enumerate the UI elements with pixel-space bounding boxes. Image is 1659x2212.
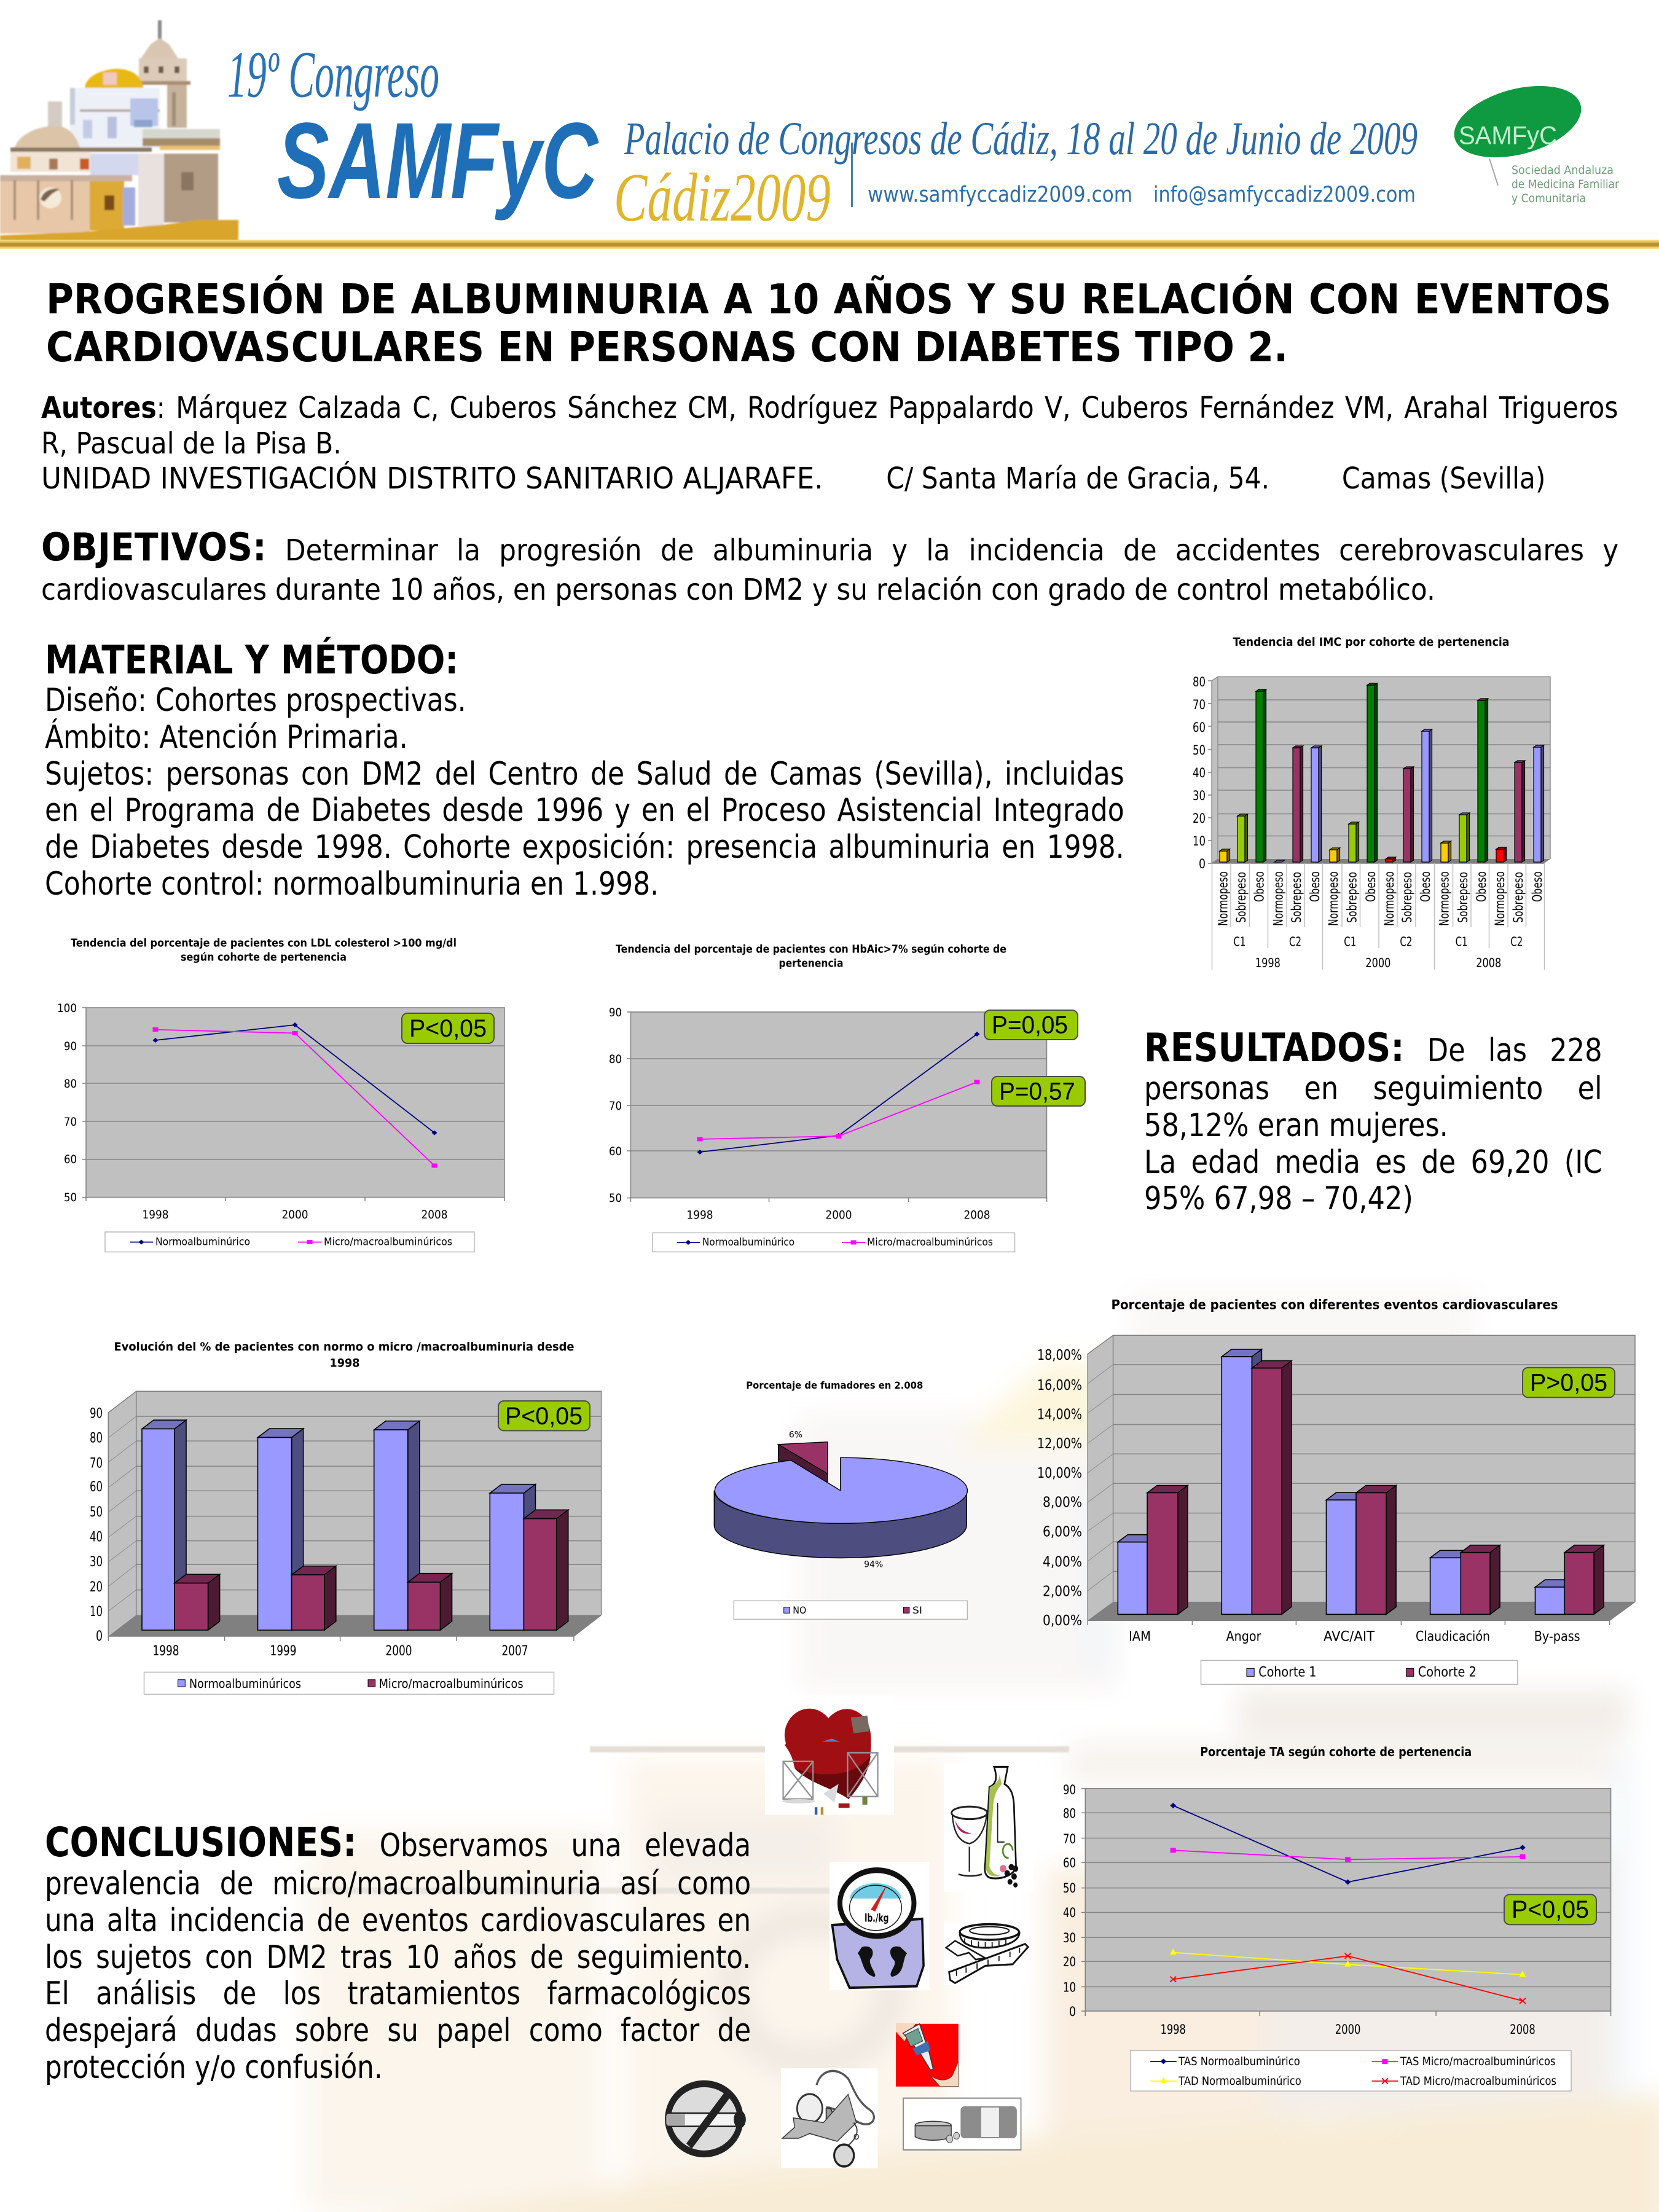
legend: NO	[793, 1604, 806, 1616]
y axis labels: 80	[1193, 675, 1206, 689]
text block: material y método: en el Programa de Diabetes desde 1996 y en el Proceso Asistencial Integrado	[45, 792, 1124, 829]
text: email: info@samfyccadiz2009.com	[1153, 182, 1416, 208]
icon: bathroom scale	[830, 1862, 930, 1990]
background watermark: faded building	[296, 1290, 1659, 2212]
axis labels	[1063, 1783, 1076, 2019]
text block: resultados: 95% 67,98 – 70,42)	[1144, 1180, 1413, 1217]
chart: Porcentaje TA	[1063, 1744, 1611, 2091]
legend	[734, 1601, 967, 1619]
slice: NO	[715, 1457, 967, 1523]
chart: HbA1c trend	[609, 943, 1085, 1252]
logo: SAMFyC society: SAMFyC	[1459, 120, 1557, 150]
axis labels: 2,00%	[1043, 1583, 1082, 1599]
chart: Porcentaje TA: 2008	[1510, 2022, 1535, 2037]
chart: eventos cardiovasculares: Claudicación	[1416, 1630, 1490, 1644]
axis labels: 60	[64, 1153, 77, 1166]
category labels	[1216, 871, 1545, 926]
chart: eventos cardiovasculares: IAM	[1129, 1630, 1151, 1644]
p-value badge: P<0,05	[1512, 1896, 1589, 1923]
background bands	[307, 1746, 1069, 1894]
text: 19º Congreso: 19º Congreso	[227, 38, 439, 112]
legend: TAS Micro/macroalbuminúricos	[1400, 2055, 1556, 2068]
text block: material y método: Sujetos: personas con DM2 del Centro de Salud de Camas (Sevilla), incluidas	[45, 756, 1124, 793]
chart title: Tendencia del porcentaje de pacientes con HbAic>7% según cohorte de	[616, 943, 1006, 956]
axis labels: 50	[609, 1191, 622, 1205]
text block: conclusiones	[45, 1819, 751, 2086]
chart: Evolución normo / micro-macroalbuminuria: 2007	[501, 1644, 528, 1659]
series: TAD Normoalbuminúrico	[1170, 1948, 1526, 1977]
chart: LDL colesterol trend: 2000	[281, 1208, 308, 1222]
axis labels: 50	[90, 1505, 103, 1520]
cohort and year labels: C1	[1344, 935, 1356, 949]
category labels: Obeso	[1252, 871, 1267, 902]
legend: Micro/macroalbuminúricos	[379, 1676, 524, 1691]
axis labels	[57, 1002, 77, 1204]
text block: conclusiones: los sujetos con DM2 tras 10 años de seguimiento.	[45, 1939, 751, 1976]
icon: sphygmomanometer	[781, 2068, 878, 2168]
p-value badge: P<0,05	[409, 1015, 487, 1042]
y axis labels: 30	[1193, 788, 1206, 803]
chart: Porcentaje de fumadores pie	[714, 1379, 967, 1619]
axis labels: 70	[609, 1099, 622, 1113]
legend: TAD Micro/macroalbuminúricos	[1400, 2074, 1556, 2088]
cohort and year labels	[1233, 935, 1523, 970]
p-value badge: P=0,05: P=0,05	[992, 1011, 1068, 1038]
text block: authors and affiliation: Camas (Sevilla)	[1342, 461, 1545, 496]
text block: conclusiones: despejará dudas sobre su papel como factor de	[45, 2012, 751, 2049]
p-value badge: P=0,57: P=0,57	[999, 1078, 1075, 1105]
category labels: Obeso	[1474, 871, 1489, 902]
axis labels: 12,00%	[1037, 1436, 1082, 1452]
legend: TAD Normoalbuminúrico	[1178, 2074, 1301, 2088]
chart title: pertenencia	[779, 957, 843, 970]
axis labels: 0	[1069, 2004, 1076, 2019]
chart: eventos cardiovasculares: AVC/AIT	[1324, 1630, 1375, 1644]
text block: material y método: de Diabetes desde 1998. Cohorte exposición: presencia albuminuria en 1998.	[45, 829, 1124, 866]
text block: authors and affiliation	[41, 391, 1618, 496]
legend: Normoalbuminúricos	[189, 1676, 301, 1691]
text block: objetivos: cardiovasculares durante 10 años, en personas con DM2 y su relación con grado de control metabólico.	[41, 573, 1435, 607]
legend: Normoalbuminúrico	[702, 1236, 794, 1249]
axis labels: 10	[90, 1604, 103, 1620]
title	[46, 275, 1611, 371]
chart: Porcentaje de fumadores pie: 94%	[864, 1560, 883, 1570]
chart: HbA1c trend: 2000	[826, 1208, 852, 1222]
logo: SAMFyC society: y Comunitaria	[1512, 192, 1586, 205]
category labels: Sobrepeso	[1289, 872, 1304, 923]
cohort and year labels: C2	[1510, 935, 1523, 949]
axis labels: 50	[1063, 1881, 1076, 1896]
text block: objetivos: OBJETIVOS: Determinar la progresión de albuminuria y la incidencia de accidentes cerebrovasculares y	[41, 525, 1618, 570]
axis labels: 18,00%	[1037, 1347, 1082, 1363]
category labels: Sobrepeso	[1456, 872, 1470, 923]
axis labels: 16,00%	[1037, 1378, 1082, 1394]
text block: resultados: personas en seguimiento el	[1144, 1070, 1602, 1107]
text block: resultados	[1144, 1025, 1602, 1217]
text block: resultados: RESULTADOS: De las 228	[1144, 1025, 1602, 1071]
axis labels: 14,00%	[1037, 1407, 1082, 1423]
chart title: Porcentaje TA según cohorte de pertenencia	[1200, 1744, 1472, 1759]
axis labels: 60	[1063, 1856, 1076, 1870]
axis labels: 20	[90, 1580, 103, 1595]
exploded slice: SI	[779, 1442, 828, 1482]
series: TAS Normoalbuminúrico	[1170, 1803, 1526, 1885]
cohort and year labels: 2000	[1365, 955, 1390, 970]
text block: material y método: MATERIAL Y MÉTODO:	[45, 637, 458, 683]
series: TAD Micro/macroalbuminúricos	[1170, 1953, 1526, 2004]
cohort and year labels: C1	[1456, 935, 1468, 949]
cohort and year labels: C2	[1289, 935, 1301, 949]
axis labels: 90	[90, 1406, 103, 1422]
legend: Micro/macroalbuminúricos	[324, 1236, 452, 1249]
category labels: Normopeso	[1326, 871, 1341, 926]
title: CARDIOVASCULARES EN PERSONAS CON DIABETES TIPO 2.	[46, 323, 1288, 371]
category labels: Obeso	[1308, 871, 1322, 902]
category labels: Normopeso	[1271, 871, 1285, 926]
series: Normoalbuminúrico	[697, 1032, 979, 1155]
text block: authors and affiliation: C/ Santa María de Gracia, 54.	[886, 461, 1269, 496]
y axis labels: 20	[1193, 811, 1206, 826]
chart: Porcentaje TA: 2000	[1335, 2022, 1360, 2037]
axis labels: 30	[90, 1555, 103, 1570]
chart title	[114, 1340, 574, 1370]
chart: LDL colesterol trend: 2008	[422, 1208, 447, 1222]
text block: authors and affiliation: UNIDAD INVESTIGACIÓN DISTRITO SANITARIO ALJARAFE.	[41, 461, 823, 496]
text: Cádiz 2009: Cádiz2009	[614, 160, 831, 236]
chart: Evolución normo / micro-macroalbuminuria: 1999	[270, 1644, 296, 1659]
legend: Normoalbuminúrico	[155, 1236, 250, 1249]
axis labels: 70	[90, 1456, 103, 1471]
chart: Tendencia del IMC	[1193, 635, 1550, 970]
banner: congress header	[0, 20, 1659, 249]
data labels: 6%	[789, 1430, 802, 1440]
chart: eventos cardiovasculares: Angor	[1226, 1630, 1261, 1644]
text block: authors and affiliation: Autores: Márquez Calzada C, Cuberos Sánchez CM, Rodríguez Pappalardo V, Cuberos Fernández VM, Arahal Trigueros	[41, 391, 1618, 425]
icon: bathroom scale: lb./kg	[865, 1912, 888, 1924]
text block: conclusiones: una alta incidencia de eventos cardiovasculares en	[45, 1902, 751, 1939]
text: SAMFyC: SAMFyC	[277, 101, 599, 221]
text: website: www.samfyccadiz2009.com	[868, 182, 1132, 208]
text block: material y método: Diseño: Cohortes prospectivas.	[45, 682, 466, 719]
cohort and year labels: C1	[1233, 935, 1245, 949]
y axis labels: 60	[1193, 720, 1206, 735]
text block: conclusiones: prevalencia de micro/macroalbuminuria así como	[45, 1865, 751, 1902]
chart: Evolución normo / micro-macroalbuminuria: 1998	[152, 1644, 179, 1659]
axis labels	[609, 1006, 622, 1205]
y axis labels: 40	[1193, 766, 1206, 780]
bars	[1220, 683, 1543, 862]
text block: resultados: 58,12% eran mujeres.	[1144, 1107, 1448, 1144]
text block: conclusiones: protección y/o confusión.	[45, 2049, 383, 2086]
series: Normoalbuminúrico	[152, 1022, 437, 1135]
axis labels: 4,00%	[1043, 1554, 1082, 1570]
bars	[142, 1420, 568, 1630]
axis labels: 0,00%	[1043, 1613, 1082, 1629]
chart title: Porcentaje de pacientes con diferentes eventos cardiovasculares	[1111, 1297, 1558, 1312]
axis labels: 100	[57, 1002, 77, 1015]
axis labels: 20	[1063, 1955, 1076, 1969]
axis labels: 40	[90, 1529, 103, 1545]
icon: glucometer and finger	[896, 2024, 959, 2087]
axis labels: 30	[1063, 1931, 1076, 1945]
axis labels: 90	[1063, 1783, 1076, 1797]
text block: conclusiones: El análisis de los tratamientos farmacológicos	[45, 1975, 751, 2012]
y axis labels: 10	[1193, 834, 1206, 849]
category labels: Sobrepeso	[1400, 872, 1414, 923]
axis labels: 80	[64, 1077, 77, 1091]
category labels: Normopeso	[1492, 871, 1507, 926]
axis labels: 50	[64, 1191, 77, 1204]
series: Micro/macroalbuminúricos	[152, 1027, 437, 1167]
legend: Cohorte 2	[1418, 1665, 1477, 1680]
axis labels	[1037, 1347, 1082, 1629]
chart title: Evolución del % de pacientes con normo o micro /macroalbuminuria desde	[114, 1340, 574, 1354]
icon: pill bottle	[903, 2098, 1021, 2150]
legend	[653, 1233, 1015, 1252]
chart title: Tendencia del porcentaje de pacientes con LDL colesterol >100 mg/dl	[71, 936, 457, 950]
axis labels: 10	[1063, 1980, 1076, 1994]
axis labels: 8,00%	[1043, 1495, 1082, 1511]
axis labels: 0	[96, 1629, 103, 1644]
logo: SAMFyC society	[1446, 73, 1619, 205]
category labels: Sobrepeso	[1234, 872, 1249, 923]
title: PROGRESIÓN DE ALBUMINURIA A 10 AÑOS Y SU RELACIÓN CON EVENTOS	[46, 275, 1611, 323]
text block: conclusiones: CONCLUSIONES: Observamos una elevada	[45, 1819, 751, 1866]
axis labels: 40	[1063, 1905, 1076, 1920]
chart: LDL colesterol trend: 1998	[143, 1208, 168, 1222]
chart title	[71, 936, 457, 963]
legend: Cohorte 1	[1258, 1665, 1317, 1680]
logo: SAMFyC society: de Medicina Familiar	[1512, 178, 1619, 191]
legend	[144, 1672, 554, 1694]
chart: HbA1c trend: 2008	[963, 1208, 990, 1222]
axis labels: 70	[1063, 1832, 1076, 1846]
chart title: Tendencia del IMC por cohorte de pertenencia	[1233, 635, 1509, 649]
axis labels: 70	[64, 1115, 77, 1129]
chart: LDL colesterol trend	[57, 936, 504, 1252]
axis labels	[90, 1406, 103, 1644]
y axis labels: 0	[1199, 857, 1206, 871]
icon: heart under construction	[765, 1696, 894, 1814]
legend: SI	[912, 1604, 922, 1616]
axis labels: 80	[609, 1053, 622, 1066]
legend	[105, 1232, 474, 1252]
chart: HbA1c trend: 1998	[687, 1208, 713, 1222]
y axis labels: 50	[1193, 743, 1206, 758]
series: TAS Micro/macroalbuminúricos	[1171, 1848, 1525, 1862]
p-value badge: P>0,05	[1530, 1369, 1607, 1396]
category separators	[1212, 863, 1545, 970]
chart: Evolución normo / micro-macroalbuminuria	[90, 1340, 602, 1694]
text block: material y método	[45, 637, 1124, 903]
category labels: Sobrepeso	[1511, 872, 1526, 923]
cohort and year labels: 2008	[1476, 955, 1501, 970]
text block: material y método: Cohorte control: normoalbuminuria en 1.998.	[45, 866, 659, 903]
axis labels: 90	[609, 1006, 622, 1019]
chart: Evolución normo / micro-macroalbuminuria: 2000	[386, 1644, 412, 1659]
p-value badge: P<0,05	[505, 1403, 582, 1430]
text block: material y método: Ámbito: Atención Primaria.	[45, 719, 408, 756]
icons: clip-art risk factors	[665, 1696, 1033, 2168]
axis labels: 10,00%	[1037, 1465, 1082, 1481]
icon: measuring tape	[944, 1921, 1029, 1985]
category labels: Obeso	[1530, 871, 1545, 902]
bars	[1118, 1349, 1604, 1614]
icon: Cádiz cathedral illustration	[0, 20, 238, 243]
text block: resultados: La edad media es de 69,20 (IC	[1144, 1144, 1602, 1181]
divider	[851, 143, 853, 207]
category labels: Normopeso	[1216, 871, 1231, 926]
axis labels: 90	[64, 1040, 77, 1053]
text block: authors and affiliation: R, Pascual de la Pisa B.	[41, 426, 342, 461]
pie side	[714, 1491, 967, 1558]
chart title	[616, 943, 1006, 970]
axis labels: 80	[90, 1430, 103, 1446]
icon: wine bottle and glass	[944, 1762, 1033, 1892]
axis labels: 80	[1063, 1806, 1076, 1821]
chart: eventos cardiovasculares: By-pass	[1534, 1630, 1580, 1644]
chart: Porcentaje TA: 1998	[1160, 2022, 1186, 2037]
gold rule	[0, 240, 1659, 249]
axis labels: 6,00%	[1043, 1524, 1082, 1540]
category labels: Obeso	[1418, 871, 1433, 902]
chart: eventos cardiovasculares	[1037, 1297, 1635, 1684]
category labels: Normopeso	[1382, 871, 1397, 926]
category labels: Normopeso	[1437, 871, 1451, 926]
axis labels: 60	[609, 1145, 622, 1158]
category labels: Obeso	[1363, 871, 1378, 902]
icon: no smoking	[665, 2084, 746, 2154]
series: Micro/macroalbuminúricos	[697, 1080, 979, 1142]
cohort and year labels: C2	[1400, 935, 1412, 949]
y axis labels: 70	[1193, 697, 1206, 712]
logo: SAMFyC society: Sociedad Andaluza	[1512, 163, 1614, 177]
legend: TAS Normoalbuminúrico	[1178, 2055, 1300, 2068]
cohort and year labels: 1998	[1255, 955, 1281, 970]
chart title: Porcentaje de fumadores en 2.008	[746, 1379, 923, 1391]
chart title: 1998	[329, 1357, 360, 1370]
axis labels: 60	[90, 1480, 103, 1495]
chart title: según cohorte de pertenencia	[181, 951, 347, 963]
y axis labels	[1193, 675, 1206, 871]
category labels: Sobrepeso	[1344, 872, 1359, 923]
legend	[1201, 1660, 1518, 1684]
legend: Micro/macroalbuminúricos	[867, 1236, 993, 1249]
legend	[1131, 2050, 1571, 2091]
text block: objetivos	[41, 525, 1618, 607]
